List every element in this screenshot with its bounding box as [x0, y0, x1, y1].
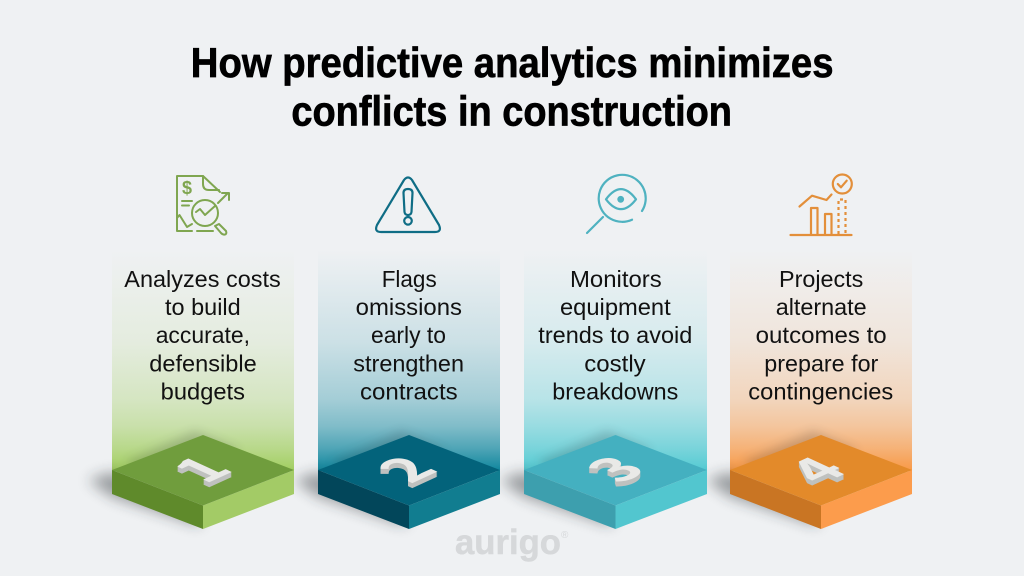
platform 2 with number: 2 — [352, 449, 454, 496]
title: How predictive analytics minimizes — [191, 39, 834, 86]
icon: magnifier with eye — [587, 175, 646, 233]
platform 1 with number: 1 — [147, 445, 249, 492]
text block: column 4: alternate — [776, 294, 867, 320]
gradient panel: column 2 — [318, 250, 500, 471]
text block: column 4: prepare for — [764, 350, 878, 376]
platform 2 with number: 2 — [352, 447, 454, 494]
icon: cost report with magnifier — [177, 176, 229, 235]
platform 1 with number: 1 — [147, 448, 249, 495]
gradient panel: column 3 — [524, 250, 707, 471]
platform 1 with number: 1 — [147, 449, 249, 496]
icon: warning triangle — [376, 178, 440, 232]
text block: column 2: early to — [371, 322, 446, 348]
icon: cost report with magnifier: $ — [182, 178, 192, 198]
platform 1 with number: 1 — [147, 446, 249, 493]
text block: column 4: outcomes to — [756, 322, 887, 348]
platform 3 with number: 3 — [561, 446, 663, 493]
platform 1 with number: 1 — [147, 447, 249, 494]
platform 4 with number: 4 — [762, 448, 864, 495]
platform 3 with number: 3 — [561, 445, 663, 492]
platform 3 with number: 3 — [561, 448, 663, 495]
text block: column 3: breakdowns — [552, 378, 678, 404]
text block: column 3 — [538, 266, 692, 404]
platform ground shadows — [88, 472, 818, 526]
text block: column 4: Projects — [779, 266, 863, 292]
platform 4 with number: 4 — [762, 450, 864, 497]
logo: aurigo: ® — [561, 530, 569, 541]
platform 4 with number: 4 — [762, 445, 864, 492]
platform 3 with number: 3 — [561, 447, 663, 494]
platform 2 with number: 2 — [352, 448, 454, 495]
platform 4 with number: 4 — [762, 446, 864, 493]
title: conflicts in construction — [291, 88, 732, 134]
platform shadows on panels — [126, 428, 856, 464]
platform 4 with number: 4 — [762, 447, 864, 494]
text block: column 1: budgets — [161, 378, 245, 404]
platform 2 with number: 2 — [352, 446, 454, 493]
gradient panel: column 4 — [730, 250, 912, 471]
title — [191, 39, 834, 134]
platform 2 with number — [318, 435, 500, 529]
text block: column 1: accurate, — [156, 322, 250, 348]
text block: column 2: omissions — [356, 294, 462, 320]
text block: column 3: Monitors — [570, 266, 662, 292]
text block: column 2: strengthen — [353, 350, 464, 376]
text block: column 2: Flags — [382, 266, 437, 292]
platform 3 with number: 3 — [561, 444, 663, 491]
text block: column 3: trends to avoid — [538, 322, 692, 348]
text block: column 4 — [748, 266, 893, 404]
text block: column 1: defensible — [149, 350, 257, 376]
platform 1 with number: 1 — [147, 444, 249, 491]
text block: column 1: to build — [165, 294, 241, 320]
platform 4 with number — [730, 435, 912, 529]
logo: aurigo: aurigo — [455, 523, 561, 562]
text block: column 2: contracts — [360, 378, 458, 404]
text block: column 4: contingencies — [748, 378, 893, 404]
text block: column 1 — [124, 266, 281, 404]
text block: column 3: equipment — [560, 294, 671, 320]
platform 2 with number: 2 — [352, 445, 454, 492]
text block: column 1: Analyzes costs — [124, 266, 281, 292]
gradient panel: column 1 — [112, 250, 294, 471]
platform 1 with number — [112, 435, 294, 529]
platform 3 with number: 3 — [561, 449, 663, 496]
icon: growth chart with check — [790, 174, 852, 235]
text block: column 2 — [353, 266, 464, 404]
text block: column 3: costly — [584, 350, 646, 376]
platform 3 with number — [524, 435, 707, 529]
platform 2 with number: 2 — [352, 444, 454, 491]
platform 4 with number: 4 — [762, 449, 864, 496]
